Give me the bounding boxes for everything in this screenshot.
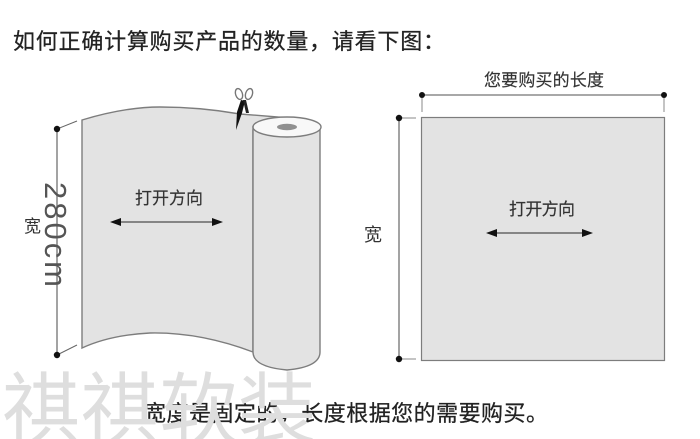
opening direction label: 打开方向 [135, 189, 203, 208]
size label 280cm: 280cm [38, 182, 73, 287]
panel: fabric roll diagram [24, 88, 321, 370]
width dimension line [54, 121, 77, 358]
fabric sheet [82, 107, 278, 352]
fabric square [422, 118, 664, 360]
width label: 宽 [24, 217, 41, 236]
width dimension line [396, 115, 416, 362]
arrow: opening direction [486, 229, 593, 237]
width label: 宽 [364, 225, 382, 245]
length dimension line [419, 92, 667, 112]
roll top [253, 117, 321, 137]
roll cylinder [253, 127, 320, 370]
opening direction label: 打开方向 [509, 200, 575, 219]
roll hole [277, 124, 297, 130]
title: 如何正确计算购买产品的数量，请看下图： [13, 29, 445, 54]
length label: 您要购买的长度 [484, 71, 604, 90]
icon: scissors [234, 88, 254, 130]
arrow: opening direction [110, 218, 223, 226]
panel: cut piece diagram [364, 71, 667, 362]
caption: 宽度是固定的，长度根据您的需要购买。 [144, 401, 548, 426]
